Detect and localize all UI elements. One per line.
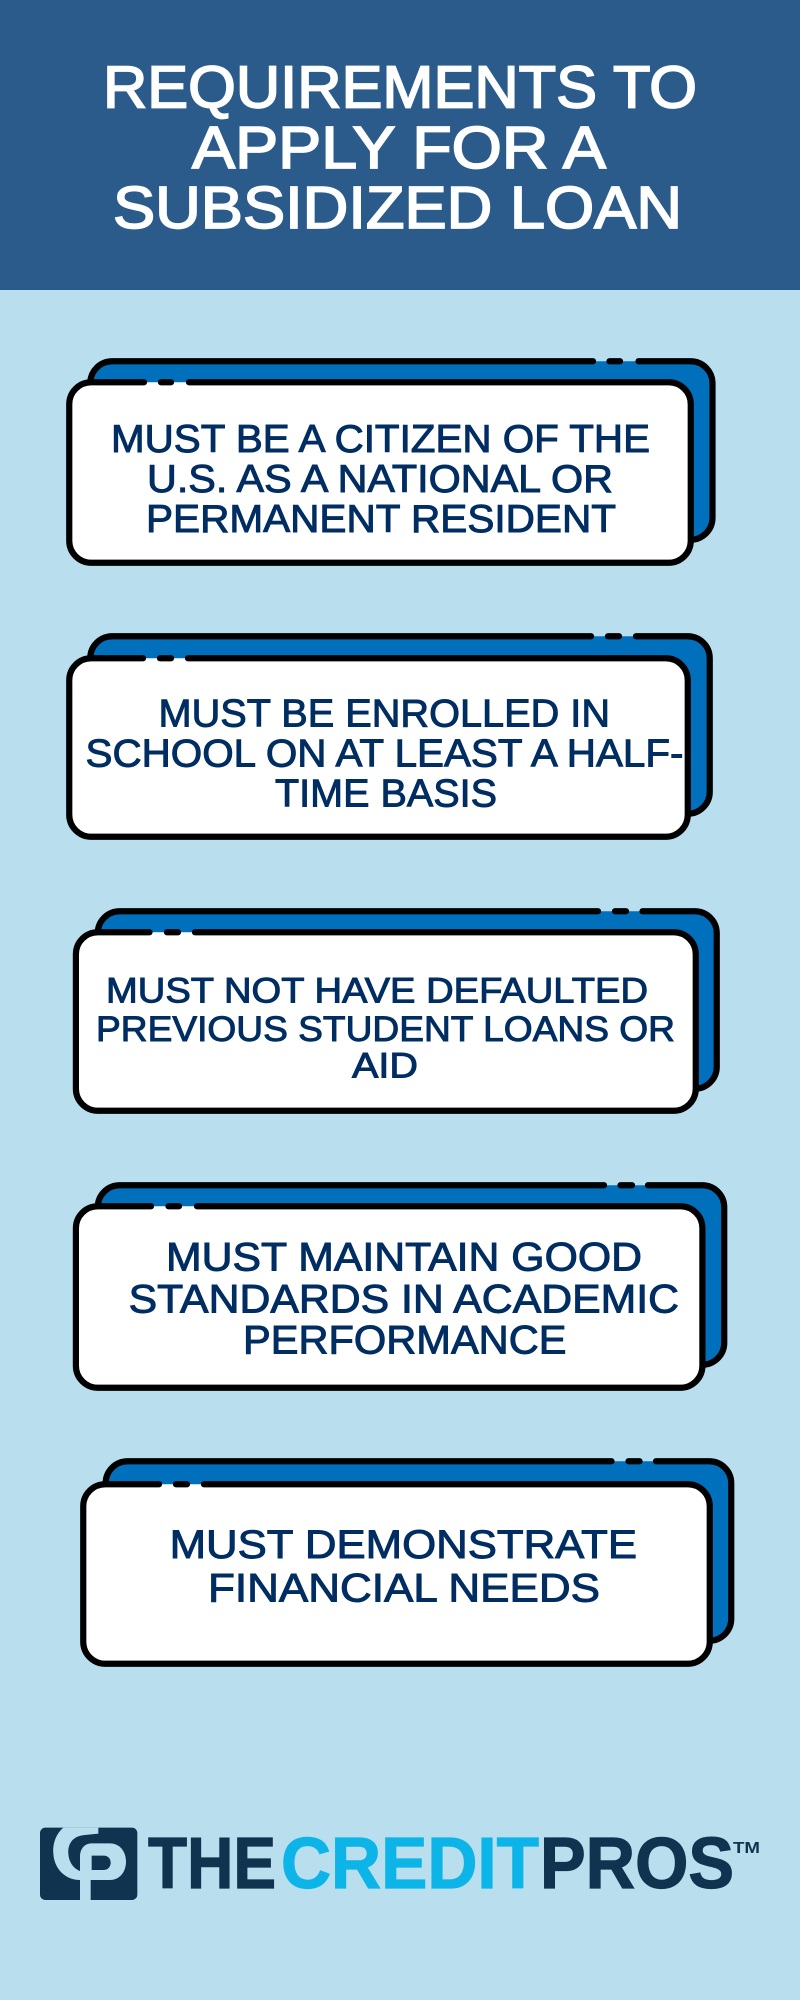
back panel: [90, 636, 710, 814]
card 4 text: PERFORMANCE: [243, 1318, 566, 1362]
card 1 text: [111, 418, 650, 541]
card 2 text: [86, 693, 684, 816]
wordmark: CREDIT: [281, 1823, 539, 1904]
card 5 text: [170, 1523, 637, 1611]
card 1 text: MUST BE A CITIZEN OF THE: [111, 418, 650, 461]
back panel: [106, 1461, 731, 1641]
card 1 text: PERMANENT RESIDENT: [146, 498, 616, 541]
title: [103, 54, 697, 241]
front panel: [76, 932, 696, 1111]
card 1: citizenship: [69, 361, 712, 563]
card 4 text: STANDARDS IN ACADEMIC: [129, 1278, 679, 1322]
front panel: [69, 658, 688, 837]
back panel: [90, 361, 712, 540]
title: REQUIREMENTS TO: [103, 54, 697, 120]
wordmark: TM: [733, 1840, 760, 1857]
icon: CP mark: [40, 1828, 137, 1900]
card 5 text: MUST DEMONSTRATE: [170, 1523, 637, 1567]
back panel: [98, 1185, 724, 1365]
front panel: [83, 1484, 710, 1664]
header band: [0, 0, 800, 290]
card 3 text: [96, 972, 675, 1086]
card 5 text: FINANCIAL NEEDS: [208, 1567, 600, 1611]
card 5: financial needs: [83, 1461, 731, 1664]
card 3 text: PREVIOUS STUDENT LOANS OR: [96, 1010, 675, 1049]
card 2 text: MUST BE ENROLLED IN: [158, 693, 610, 736]
card 4 text: [129, 1236, 679, 1362]
card 3: no defaults: [76, 911, 717, 1111]
card 3 text: MUST NOT HAVE DEFAULTED: [106, 972, 648, 1011]
title: SUBSIDIZED LOAN: [113, 174, 682, 241]
card 2: enrollment: [69, 636, 710, 837]
wordmark: PROS: [540, 1823, 734, 1904]
card 4: academic standards: [76, 1185, 724, 1388]
title: APPLY FOR A: [192, 114, 606, 181]
back panel: [98, 911, 717, 1089]
card 1 text: U.S. AS A NATIONAL OR: [147, 458, 613, 501]
wordmark: [148, 1823, 760, 1904]
wordmark: THE: [148, 1823, 276, 1904]
logo: The Credit Pros: [40, 1823, 760, 1904]
front panel: [76, 1206, 702, 1388]
card 2 text: SCHOOL ON AT LEAST A HALF-: [86, 733, 684, 776]
front panel: [69, 382, 691, 563]
card 4 text: MUST MAINTAIN GOOD: [166, 1236, 642, 1280]
card 2 text: TIME BASIS: [275, 773, 497, 816]
card 3 text: AID: [352, 1047, 418, 1086]
